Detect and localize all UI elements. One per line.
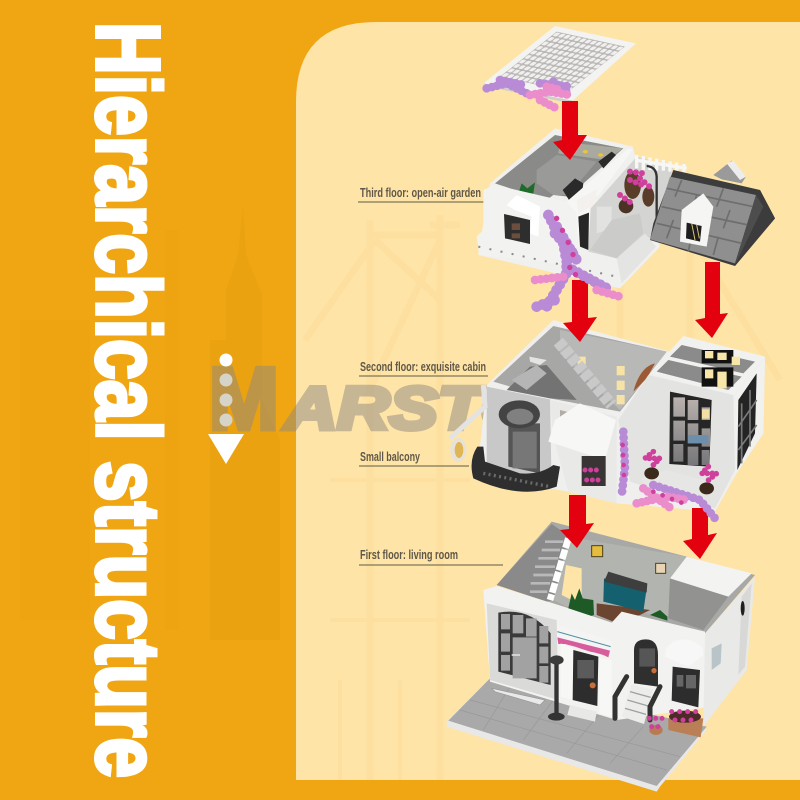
label: second floor [359,360,488,376]
label: first floor: First floor: living room [360,548,458,562]
model: second floor [450,320,765,512]
chimney [713,161,746,183]
left front wall [487,387,552,487]
model: roof plate [483,26,636,103]
arched shop window [498,612,551,685]
pink awning [557,625,612,657]
dividing wall [567,148,633,250]
arrow: third floor to second floor left [563,280,597,342]
front wall [483,586,707,720]
front wall [477,185,578,268]
flowers: third floor wisteria [535,215,620,307]
interior stairs [507,342,612,405]
center wall [550,400,617,503]
model: first floor [447,522,755,792]
garden floor [588,157,673,258]
right wall [703,577,755,727]
brown furniture [633,363,655,392]
label: third floor: Third floor: open-air garden [360,186,481,200]
model: third floor [477,128,775,288]
arrow: roof plate to third floor [553,101,587,160]
room interior [495,135,623,200]
plants [567,588,594,617]
bench [492,688,545,705]
window [504,214,530,244]
entry stairs [615,677,660,724]
step [567,705,597,722]
panel: cream background [296,22,800,780]
icon: dotted down arrow [208,354,244,464]
tower side wall [735,358,765,473]
white awning [548,403,616,460]
small window [582,456,606,486]
wall pictures [592,546,603,557]
cabin interior [493,326,667,412]
arched french door [499,400,540,473]
outer shell [477,320,765,512]
flower pots [619,171,654,213]
balcony railing [472,447,560,492]
watermark: brand name: M [209,349,279,448]
window with umbrella [665,639,703,707]
siding panel [561,643,573,700]
potted flowers [644,452,717,494]
dark furniture [563,152,616,202]
flowers: second floor [622,432,715,518]
key-shaped bracket [450,385,485,462]
arched door [634,639,658,687]
base plate [447,678,707,792]
watermark: brand name [209,349,591,448]
roof [650,170,775,266]
cornice studs [478,247,617,277]
fish tank [597,572,650,622]
arrow: second floor to first floor left [560,495,594,548]
label: small balcony [359,450,469,466]
tower front wall [618,375,735,508]
shop door [573,650,598,706]
stairs [530,538,568,600]
lamp [647,166,657,218]
window slots [617,366,625,375]
label: small balcony: Small balcony [360,450,420,464]
background: faint bridge on panel [305,215,780,780]
arrow: roof to second floor right [695,262,728,338]
fence [635,155,687,173]
entry tile [640,470,710,500]
watermark: brand name: ARSTOY [283,375,591,442]
dormer [680,193,713,247]
tower top [650,336,765,395]
window opening [562,565,582,605]
flowers: roof plate [487,80,572,108]
background: faint skyline on orange [20,205,280,640]
plant [518,182,535,193]
tower big window [669,392,712,467]
flower pots [649,711,703,737]
street lamp [548,655,565,721]
arrow: second floor to first floor right [683,508,717,559]
outer shell [478,128,660,288]
interior floor and walls [497,522,755,633]
label: second floor: Second floor: exquisite cabin [360,360,486,374]
side rail [617,233,656,283]
white top block [670,557,752,597]
